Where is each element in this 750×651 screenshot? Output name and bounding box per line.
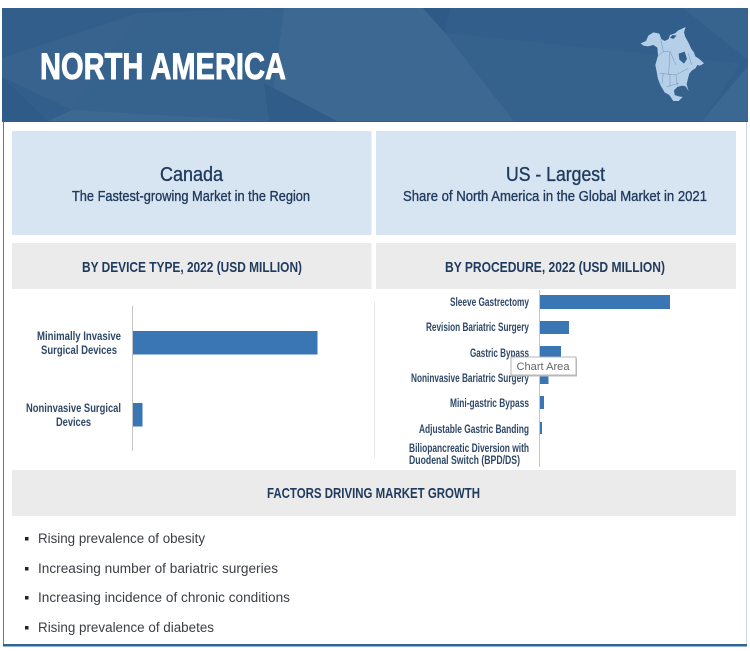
- subheading: Canada: The Fastest-growing Market in the Region: [72, 188, 310, 205]
- tooltip: chart area: Chart Area: [516, 361, 570, 373]
- panel heading: factors driving market growth: [12, 470, 736, 516]
- bar chart: procedure: [409, 290, 670, 467]
- category labels: Gastric Bypass: [470, 348, 529, 360]
- category labels: [409, 297, 529, 467]
- bar chart: device type: [26, 306, 318, 451]
- panel: Canada: [12, 131, 372, 235]
- panel heading: by device type: BY DEVICE TYPE, 2022 (USD MILLION): [82, 259, 302, 276]
- panel heading: by procedure: BY PROCEDURE, 2022 (USD MILLION): [445, 259, 665, 276]
- heading: US: US - Largest: [506, 164, 605, 186]
- category labels: Biliopancreatic Diversion with: [409, 443, 529, 455]
- header banner: [2, 8, 748, 122]
- panel heading: factors driving market growth: FACTORS DRIVING MARKET GROWTH: [267, 485, 480, 502]
- bar: minimally invasive: [133, 331, 318, 354]
- label: minimally invasive: Minimally Invasive: [37, 331, 121, 343]
- label: noninvasive: Noninvasive Surgical: [26, 403, 121, 415]
- category labels: Revision Bariatric Surgery: [426, 322, 529, 334]
- label: noninvasive: Devices: [56, 417, 91, 429]
- panel heading: by procedure: [376, 243, 736, 289]
- category labels: Duodenal Switch (BPD/DS): [409, 455, 520, 467]
- panel: US: [376, 131, 736, 235]
- subheading: US: Share of North America in the Global Market in 2021: [403, 188, 707, 205]
- icon: north america map: [641, 27, 704, 101]
- factor 3: Increasing incidence of chronic conditions: [38, 590, 290, 605]
- category labels: Noninvasive Bariatric Surgery: [411, 373, 529, 385]
- factor 1: Rising prevalence of obesity: [38, 531, 205, 546]
- panel heading: by device type: [12, 243, 372, 289]
- list: growth factors: [25, 531, 290, 635]
- category labels: Adjustable Gastric Banding: [419, 424, 529, 436]
- title: NORTH AMERICA: [40, 46, 286, 87]
- factor 4: Rising prevalence of diabetes: [38, 620, 214, 635]
- outer frame: [3, 122, 747, 646]
- heading: Canada: Canada: [160, 164, 224, 186]
- bars: [540, 295, 670, 434]
- label: minimally invasive: [37, 331, 121, 357]
- label: minimally invasive: Surgical Devices: [41, 345, 117, 357]
- tooltip: chart area: [511, 357, 577, 376]
- category labels: Sleeve Gastrectomy: [450, 297, 529, 309]
- label: noninvasive: [26, 403, 121, 429]
- category labels: Mini-gastric Bypass: [450, 398, 529, 410]
- factor 2: Increasing number of bariatric surgeries: [38, 561, 278, 576]
- bar: noninvasive: [133, 403, 142, 426]
